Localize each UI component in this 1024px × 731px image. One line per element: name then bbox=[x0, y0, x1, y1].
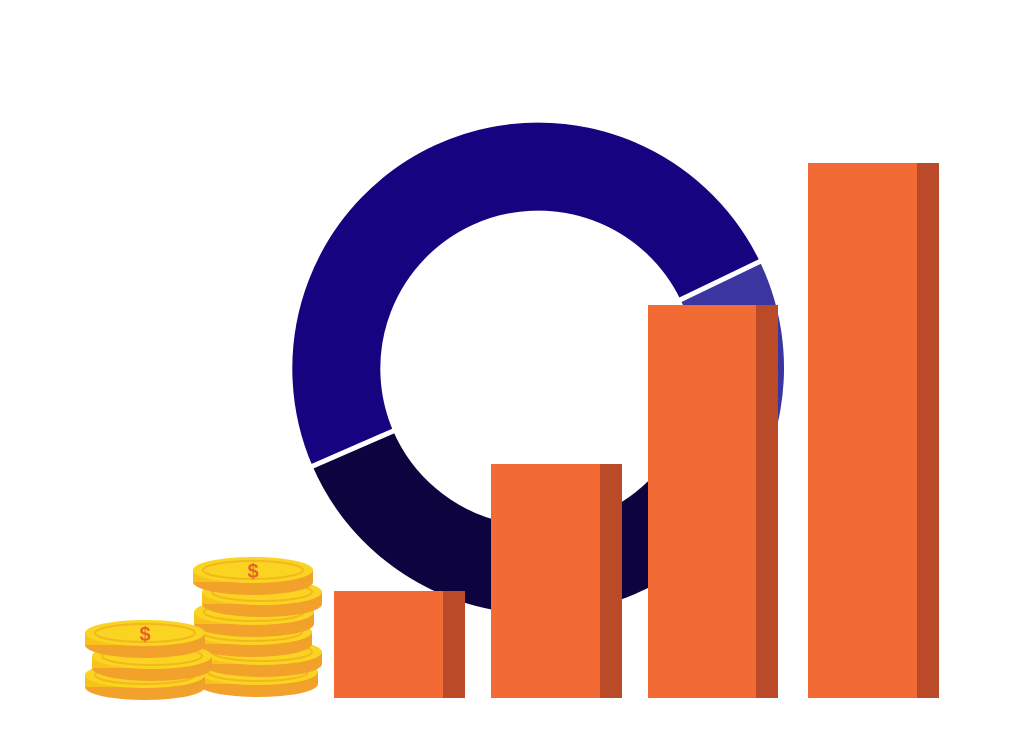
bar 4 bbox=[808, 163, 939, 698]
coin stack left: $ bbox=[139, 624, 151, 646]
donut chart bbox=[290, 167, 790, 570]
bar 3 bbox=[648, 305, 778, 698]
coin stack right: $ bbox=[247, 561, 259, 583]
coin stack left bbox=[85, 620, 212, 700]
bar 2 bbox=[491, 464, 622, 698]
bar 1 bbox=[334, 591, 465, 698]
coin stack right bbox=[192, 557, 322, 697]
